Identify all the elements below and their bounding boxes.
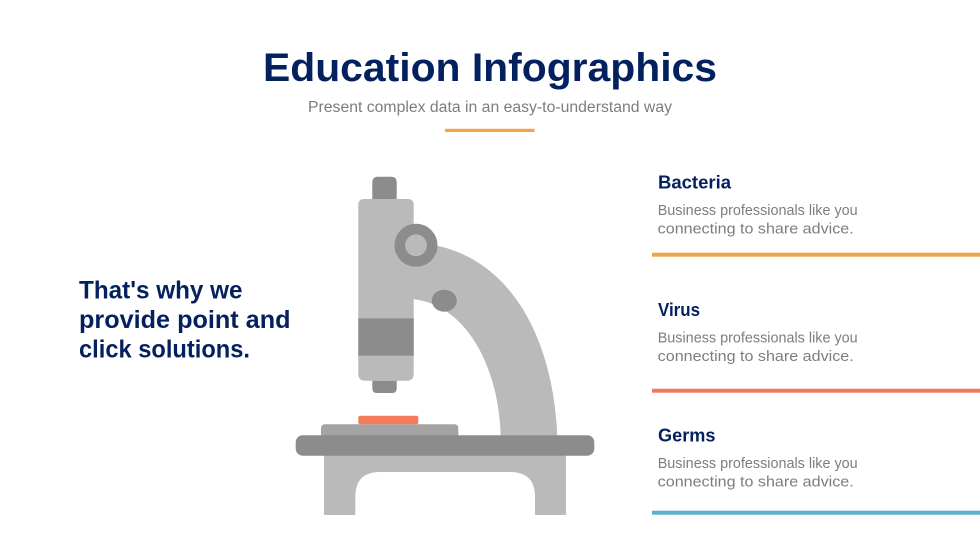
item: Virus: Business professionals like you [658,330,858,346]
item: Bacteria: connecting to share advice. [658,220,854,237]
item: Bacteria: Business professionals like you [658,202,858,219]
objective lens [372,381,397,393]
left statement text: provide point and [79,306,290,334]
legs [324,450,566,515]
adjustment knob [432,290,457,312]
specimen slide [358,416,418,424]
icon: microscope [296,177,594,515]
base bar [296,435,594,456]
title: Education Infographics [263,46,717,90]
item: Germs: Business professionals like you [658,455,858,472]
item: Germs: Germs [658,424,716,446]
item: Germs: connecting to share advice. [658,473,854,490]
left statement text [79,276,290,363]
item: Bacteria [652,171,980,257]
stage [321,424,458,437]
subtitle: Present complex data in an easy-to-understand way [308,99,672,116]
microscope arm [410,244,557,437]
left statement text: click solutions. [79,335,250,363]
microscope top knob [372,177,397,207]
item: Virus: Virus [658,299,700,320]
focus ring [400,229,432,262]
item: Bacteria: Bacteria [658,171,732,192]
item: Germs [652,424,980,515]
tube dark band [358,318,414,356]
item: Virus: connecting to share advice. [658,348,854,365]
left statement text: That's why we [79,276,243,304]
item: Virus [652,299,980,393]
title accent line [445,129,534,132]
microscope tube [358,199,414,381]
